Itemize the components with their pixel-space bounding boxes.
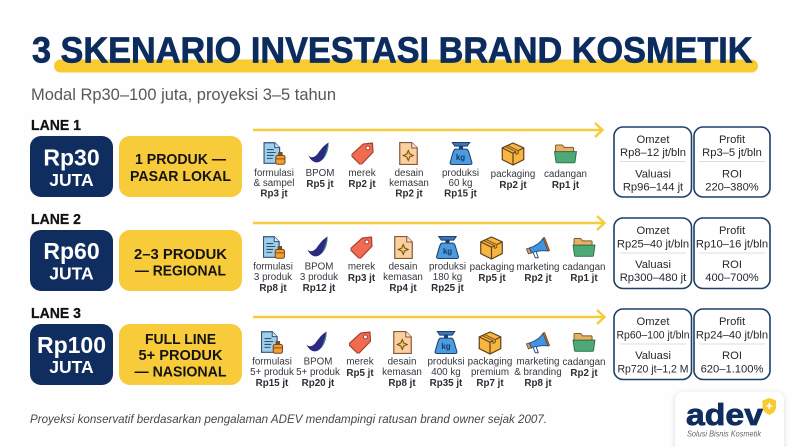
item: formulasi: Rp3 jt <box>260 188 288 200</box>
item: packaging premium: packaging <box>468 356 512 368</box>
lane 2 scope badge: 2–3 PRODUK <box>134 246 227 263</box>
item: produksi: Rp15 jt <box>444 188 478 200</box>
item: BPOM: BPOM <box>306 168 334 179</box>
lane 2 capital badge <box>30 230 113 291</box>
item: BPOM <box>306 142 334 190</box>
item: produksi <box>429 237 466 294</box>
item: merek <box>348 237 376 284</box>
lane 3 results: profit and ROI <box>694 309 770 380</box>
lane 2 results: omzet and valuasi <box>614 218 692 288</box>
item: cadangan: cadangan <box>562 262 606 273</box>
item: cadangan: Rp2 jt <box>570 368 598 379</box>
lane 1 results: profit and ROI: ROI <box>722 168 742 180</box>
item: merek: merek <box>346 356 374 368</box>
lane 3 capital badge <box>30 324 113 385</box>
lane 1 results: omzet and valuasi: Rp8–12 jt/bln <box>620 147 686 159</box>
subtitle: Modal Rp30–100 juta, proyeksi 3–5 tahun <box>31 85 336 104</box>
item: BPOM: Rp12 jt <box>303 283 336 294</box>
lane 3 arrow <box>253 310 604 324</box>
item: packaging: packaging <box>491 169 535 180</box>
item: formulasi: formulasi <box>253 262 293 272</box>
item: desain kemasan: Rp4 jt <box>389 283 417 294</box>
item: marketing and branding: Rp8 jt <box>524 378 552 389</box>
item: produksi: kg <box>441 342 451 351</box>
item: formulasi: formulasi <box>254 168 294 179</box>
panel: lane 1 <box>30 117 770 200</box>
lane 1 scope badge <box>119 136 242 197</box>
lane 3 capital badge: JUTA <box>49 357 94 377</box>
item: formulasi: formulasi <box>252 356 292 368</box>
lane 3 scope badge: — NASIONAL <box>134 364 226 380</box>
lane 1 results: omzet and valuasi: Omzet <box>637 134 670 146</box>
lane 2 capital badge: Rp60 <box>43 238 100 264</box>
item: produksi: kg <box>456 153 465 162</box>
item: desain kemasan: desain <box>395 168 423 179</box>
item: marketing and branding <box>514 333 562 389</box>
item: formulasi <box>253 237 293 294</box>
item: produksi: produksi <box>442 168 479 179</box>
item: desain kemasan <box>389 142 429 200</box>
item: cadangan <box>562 238 606 284</box>
item: formulasi: Rp8 jt <box>259 283 287 294</box>
item: BPOM: BPOM <box>304 356 332 368</box>
item: BPOM: BPOM <box>305 262 333 272</box>
lane 3 results: omzet and valuasi: Valuasi <box>635 350 671 362</box>
panel: lane 2 <box>30 211 770 294</box>
icon: shield <box>762 398 776 415</box>
lane 3 heading: LANE 3 <box>31 305 81 322</box>
item: produksi: 400 kg <box>431 367 461 378</box>
item: merek <box>348 143 376 190</box>
item: marketing <box>516 238 560 284</box>
item: packaging: Rp5 jt <box>478 273 506 284</box>
item: merek: merek <box>348 262 375 272</box>
lane 3 results: profit and ROI: 620–1.100% <box>701 364 763 376</box>
item: formulasi <box>250 332 294 389</box>
item: merek: Rp3 jt <box>348 273 376 284</box>
lane 2 results: omzet and valuasi: Valuasi <box>635 259 671 271</box>
item: cadangan <box>544 145 587 191</box>
lane 1 arrow <box>253 123 602 137</box>
item: desain kemasan: kemasan <box>383 272 423 283</box>
item: formulasi <box>254 143 294 200</box>
lane 2 results: omzet and valuasi: Rp25–40 jt/bln <box>617 238 689 250</box>
item: desain kemasan <box>382 332 422 389</box>
footnote: Proyeksi konservatif berdasarkan pengalaman ADEV mendampingi ratusan brand owner sejak 2007. <box>30 412 547 426</box>
lane 2 heading: LANE 2 <box>31 211 81 228</box>
item: cadangan: cadangan <box>544 169 587 180</box>
lane 1 scope badge: 1 PRODUK — <box>135 151 226 168</box>
lane 3 scope badge: FULL LINE <box>145 331 216 348</box>
lane 2 results: profit and ROI: 400–700% <box>705 272 759 284</box>
item: BPOM: 5+ produk <box>296 367 340 378</box>
lane 1 capital badge: JUTA <box>49 170 94 190</box>
item: marketing: Rp2 jt <box>524 273 552 284</box>
lane 1 results: profit and ROI: 220–380% <box>705 182 759 194</box>
lane 1 results: omzet and valuasi: Rp96–144 jt <box>623 182 684 194</box>
item: packaging premium: Rp7 jt <box>476 378 504 389</box>
lane 1 results: profit and ROI <box>694 127 770 197</box>
item: desain kemasan: kemasan <box>389 178 429 189</box>
lane 3 results: omzet and valuasi <box>614 309 692 380</box>
item: produksi: Rp25 jt <box>431 283 465 294</box>
item: cadangan: Rp1 jt <box>570 273 598 284</box>
panel: lane 3 <box>30 305 770 389</box>
item: merek: Rp5 jt <box>346 368 374 379</box>
item: produksi: 180 kg <box>433 272 462 283</box>
item: cadangan <box>562 333 606 379</box>
item: merek <box>346 332 374 379</box>
item: packaging <box>491 143 535 191</box>
lane 2 scope badge <box>119 230 242 291</box>
logo card: Solusi Bisnis Kosmetik <box>687 430 762 438</box>
item: merek: merek <box>348 168 376 179</box>
item: packaging <box>470 237 514 284</box>
lane 2 results: omzet and valuasi: Omzet <box>637 225 670 237</box>
lane 3 scope badge <box>119 324 242 385</box>
lane 2 results: profit and ROI: Profit <box>719 225 746 237</box>
lane 1 results: omzet and valuasi <box>614 127 692 197</box>
item: produksi <box>427 332 465 389</box>
item: packaging: packaging <box>470 262 514 273</box>
item: marketing and branding: & branding <box>514 367 562 378</box>
item: produksi <box>442 143 479 200</box>
lane 3 capital badge: Rp100 <box>37 332 106 358</box>
lane 3 results: omzet and valuasi: Rp720 jt–1,2 M <box>618 364 688 376</box>
item: cadangan: cadangan <box>562 357 606 368</box>
item: desain kemasan: kemasan <box>382 367 422 378</box>
item: formulasi: 5+ produk <box>250 367 294 378</box>
item: packaging premium: premium <box>471 367 509 378</box>
item: desain kemasan: Rp2 jt <box>395 188 423 200</box>
item: marketing: marketing <box>516 262 560 273</box>
lane 2 results: profit and ROI: Rp10–16 jt/bln <box>696 238 768 250</box>
lane 1 results: profit and ROI: Rp3–5 jt/bln <box>702 147 762 159</box>
item: desain kemasan: Rp8 jt <box>388 378 416 389</box>
lane 3 results: profit and ROI: Rp24–40 jt/bln <box>696 330 768 342</box>
item: produksi: 60 kg <box>449 178 472 189</box>
item: BPOM: Rp20 jt <box>302 378 335 389</box>
item: merek: Rp2 jt <box>348 179 376 190</box>
lane 2 capital badge: JUTA <box>49 264 94 284</box>
lane 2 scope badge: — REGIONAL <box>135 262 226 280</box>
lane 1 scope badge: PASAR LOKAL <box>130 168 231 185</box>
item: formulasi: 3 produk <box>254 272 292 283</box>
item: formulasi: & sampel <box>254 178 294 189</box>
title: 3 SKENARIO INVESTASI BRAND KOSMETIK <box>32 30 753 70</box>
item: marketing and branding: marketing <box>516 356 560 368</box>
lane 1 capital badge: Rp30 <box>43 144 100 170</box>
item: formulasi: Rp15 jt <box>256 378 289 389</box>
item: cadangan: Rp1 jt <box>552 180 580 191</box>
item: produksi: Rp35 jt <box>430 378 463 389</box>
lane 1 heading: LANE 1 <box>31 117 81 134</box>
lane 2 results: omzet and valuasi: Rp300–480 jt <box>620 272 687 284</box>
lane 2 results: profit and ROI: ROI <box>722 259 742 271</box>
item: produksi: kg <box>443 247 452 256</box>
lane 2 arrow <box>253 216 604 230</box>
logo card <box>675 392 784 447</box>
item: BPOM: 3 produk <box>300 272 338 283</box>
lane 2 results: profit and ROI <box>694 218 770 288</box>
item: desain kemasan: desain <box>388 356 416 368</box>
lane 1 results: omzet and valuasi: Valuasi <box>635 168 671 180</box>
item: desain kemasan: desain <box>389 262 417 272</box>
lane 3 scope badge: 5+ PRODUK <box>138 347 223 364</box>
item: packaging premium <box>468 332 512 389</box>
item: packaging: Rp2 jt <box>499 180 527 191</box>
item: BPOM <box>296 332 340 389</box>
lane 3 results: omzet and valuasi: Rp60–100 jt/bln <box>616 330 690 342</box>
item: BPOM: Rp5 jt <box>306 179 334 190</box>
lane 3 results: omzet and valuasi: Omzet <box>637 316 670 328</box>
logo card: adev <box>686 397 764 432</box>
item: produksi: produksi <box>427 356 465 368</box>
item: desain kemasan <box>383 236 423 294</box>
lane 3 results: profit and ROI: ROI <box>722 350 742 362</box>
item: BPOM <box>300 236 338 294</box>
lane 1 results: profit and ROI: Profit <box>719 134 746 146</box>
lane 3 results: profit and ROI: Profit <box>719 316 746 328</box>
lane 1 capital badge <box>30 136 113 197</box>
item: produksi: produksi <box>429 262 466 272</box>
